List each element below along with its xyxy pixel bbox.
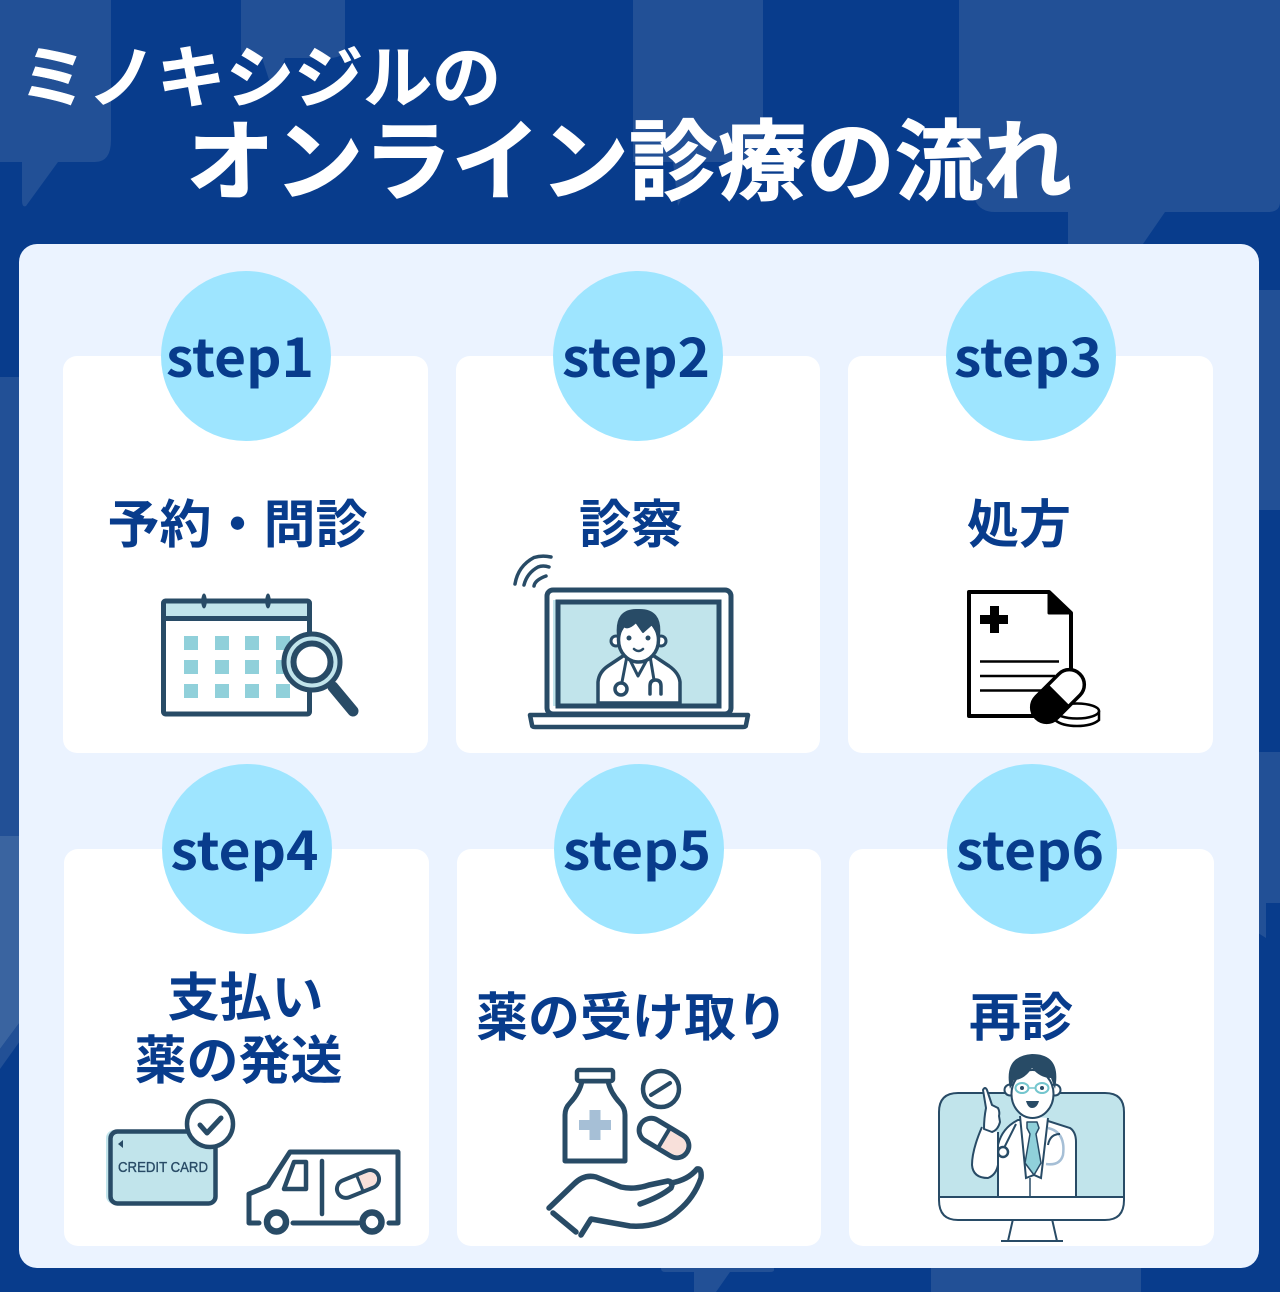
step 2 badge: step2 [562,317,710,393]
step 2 heading: 診察 [579,497,683,555]
title: ミノキシジルの [19,41,501,117]
icon: delivery van [249,1152,398,1232]
step 3 badge [946,271,1116,441]
step 1 heading: 予約・問診 [107,497,368,555]
title: オンライン診療の流れ [186,113,1072,212]
icon: calendar with magnifier [164,594,353,714]
step 4 badge: step4 [170,810,318,886]
step 4 badge [162,764,332,934]
step 5 heading: 薬の受け取り [476,990,788,1048]
icon: prescription and pills [969,592,1099,729]
step 1 badge [161,271,331,441]
icon: monitor with doctor [939,1054,1124,1241]
step 4 heading: 薬の発送 [134,1033,343,1091]
panel: step 6 card [849,764,1214,1246]
step 4 heading [134,970,343,1091]
step 1 badge: step1 [166,317,314,393]
step 6 badge [947,764,1117,934]
step 2 badge [553,271,723,441]
step 3 badge: step3 [954,317,1102,393]
panel: step 3 card [848,271,1213,753]
step 6 heading: 再診 [969,990,1073,1048]
icon: laptop with doctor [515,556,748,727]
step 5 badge: step5 [563,810,711,886]
title [19,41,1072,212]
icon: credit card: CREDIT CARD [118,1160,208,1176]
panel: step 4 card [64,764,429,1246]
panel: step 5 card [457,764,821,1246]
step 6 badge: step6 [956,810,1104,886]
step 5 badge [554,764,724,934]
main panel [19,244,1259,1268]
panel: step 1 card [63,271,428,753]
step 4 heading: 支払い [167,970,324,1028]
step 3 heading: 処方 [967,497,1071,555]
icon: medicine bottle, pills and hand [549,1070,701,1235]
icon: credit card [106,1101,233,1204]
panel: step 2 card [456,271,820,753]
